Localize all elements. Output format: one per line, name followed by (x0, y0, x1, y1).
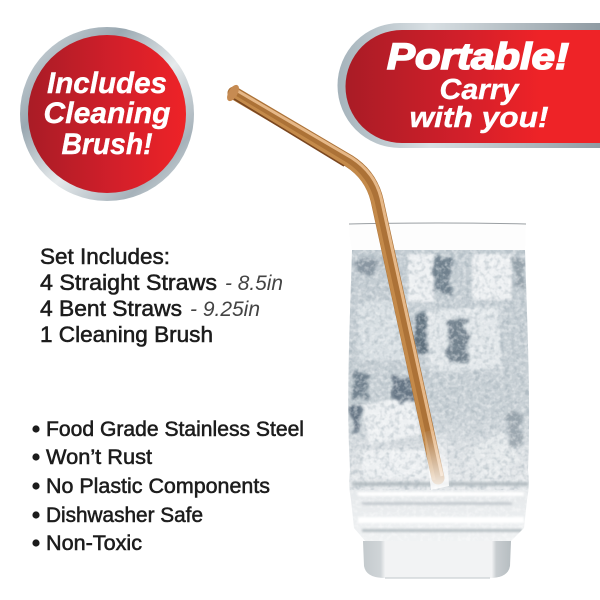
badge: includes cleaning brush: Brush! (62, 128, 153, 161)
badge: includes cleaning brush (20, 27, 194, 201)
glass rim and upper wall (349, 223, 526, 250)
water and ice cubes (345, 250, 535, 545)
badge: portable, carry with you: with you! (410, 102, 549, 134)
badge: portable, carry with you: Carry (440, 74, 520, 106)
badge: includes cleaning brush: Cleaning (44, 97, 170, 130)
badge: portable, carry with you: Portable! (387, 36, 569, 77)
feature bullet list: Won’t Rust (46, 446, 152, 469)
feature bullet list: Food Grade Stainless Steel (46, 418, 304, 441)
set contents list: - 8.5in (225, 272, 283, 295)
set contents list: 1 Cleaning Brush (40, 322, 213, 347)
glass base (363, 541, 511, 578)
feature bullet list: No Plastic Components (46, 475, 270, 498)
straw flared tip (225, 83, 241, 103)
set contents list (40, 244, 283, 347)
ice cubes (358, 254, 521, 484)
set contents list: 4 Straight Straws (40, 270, 217, 295)
bent gold straw (225, 83, 449, 490)
set contents list: - 9.25in (190, 298, 260, 321)
feature bullet list (32, 418, 304, 555)
ridges near the glass bottom (352, 482, 528, 532)
badge: portable, carry with you (338, 23, 600, 148)
set contents list: 4 Bent Straws (40, 296, 182, 321)
feature bullet list: Dishwasher Safe (46, 504, 203, 527)
set contents list: Set Includes: (40, 244, 170, 269)
feature bullet list: Non-Toxic (46, 532, 142, 555)
badge: includes cleaning brush: Includes (47, 67, 167, 100)
glass of sparkling water with ice (345, 223, 535, 578)
dark gaps between ice (352, 258, 524, 448)
